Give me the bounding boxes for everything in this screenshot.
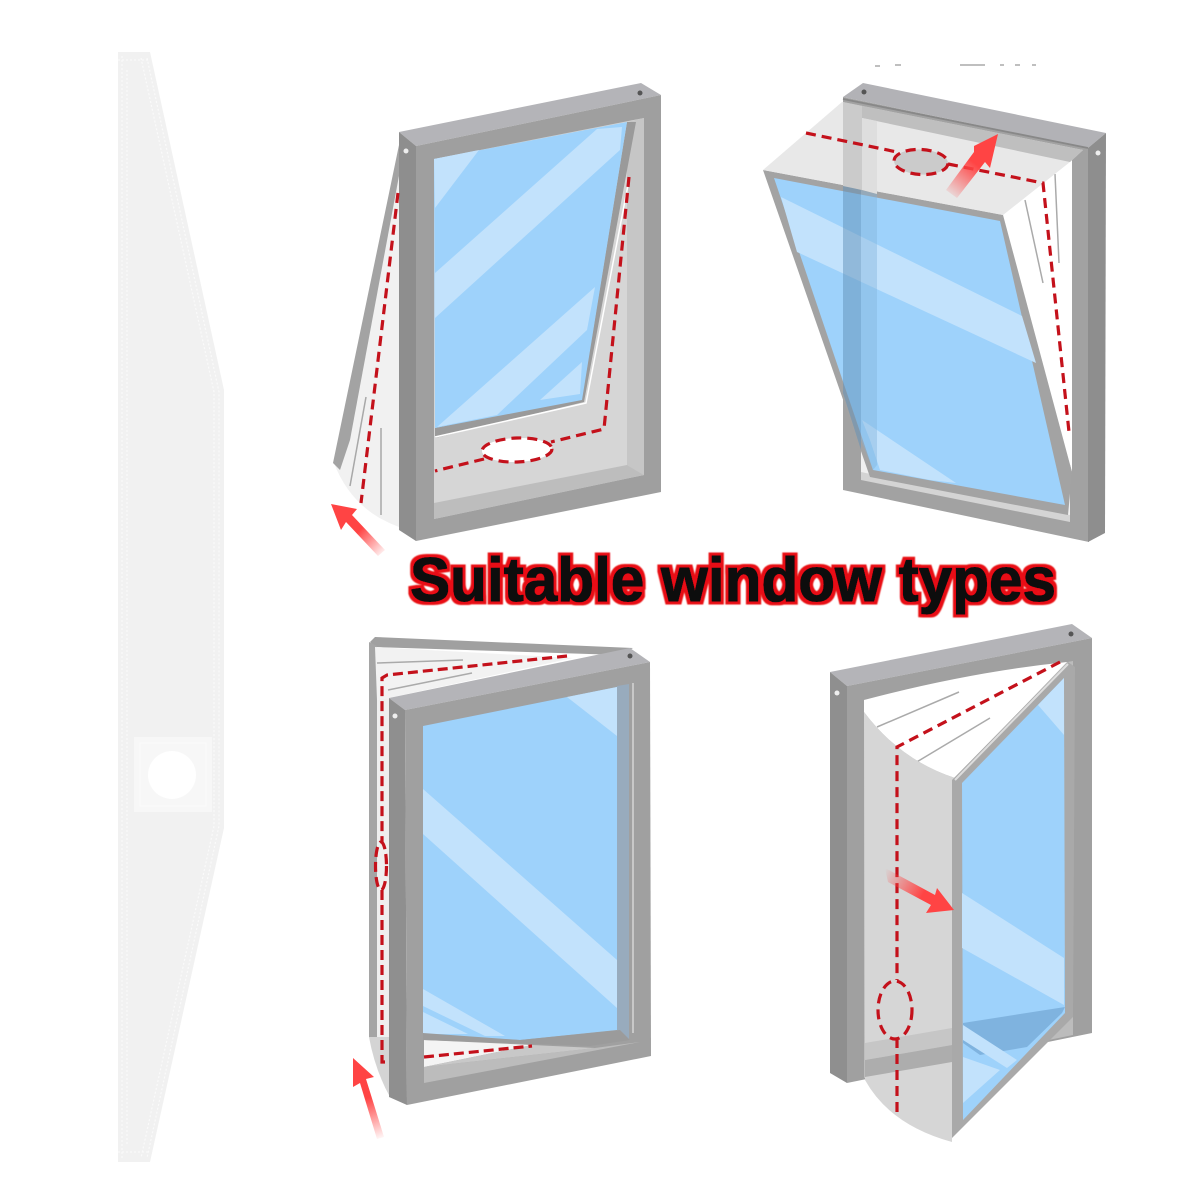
fold-out seal at left side [333,145,401,527]
frame [399,83,661,541]
arrow [885,868,954,913]
small faint remnant marks above window [875,65,1036,66]
tilted sash frame [435,122,636,438]
arrow [353,1058,384,1139]
seal grey body [864,712,955,1142]
frame [389,648,651,1105]
panel: transparent window seal strip [118,52,224,1162]
red dashed seal line with hose opening [361,177,629,503]
glass pane [774,178,1065,505]
glass pane [962,678,1065,1120]
sash frame [763,170,1072,515]
arrow [946,134,998,198]
red dashed seal line with hose opening [878,662,1060,1113]
frame seen through transparent seal [843,185,861,450]
seal white top [864,662,1067,778]
white side seal [1003,160,1072,472]
hose opening patch with circular hole [134,737,212,812]
shadow band of frame through seal [865,1028,952,1077]
glass pane [434,122,627,428]
arrow [331,504,385,556]
translucent seal over top [763,102,1083,215]
sash frame [952,662,1075,1138]
rear frame and seal [369,637,633,1097]
opened sash bottom edge [423,1030,630,1046]
window 1: top-hung window opening outward [331,83,661,556]
window 4: side-hung window opening with fold-out seal [830,624,1092,1142]
red dashed seal line with hose opening [806,133,1069,432]
membrane edge highlight [435,180,629,437]
glass pane [423,687,617,1040]
window 3: side-hung window opening inward [353,637,651,1139]
frame [843,83,1106,542]
red dashed seal line with hose opening [376,656,567,1062]
window 2: bottom-hung window tilting inward [763,65,1106,542]
frame [830,624,1092,1083]
title: Suitable window types [410,546,1056,615]
